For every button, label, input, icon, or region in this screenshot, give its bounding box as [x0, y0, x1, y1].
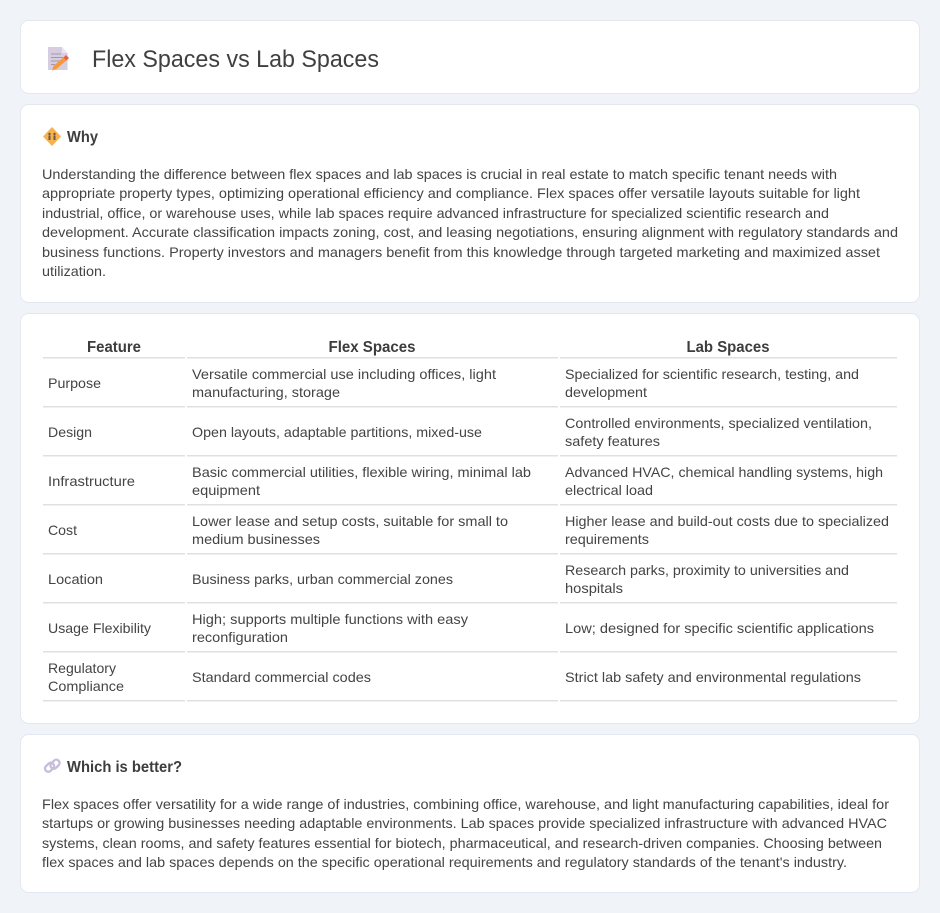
- row: infrastructure: [48, 464, 883, 498]
- row: purpose: Purpose: [48, 375, 101, 391]
- row: infrastructure: Infrastructure: [48, 473, 135, 489]
- table header row: Flex Spaces: [328, 339, 416, 356]
- text block: why paragraph: industrial, office, or warehouse uses, while lab spaces require advanced infrastructure for specialized scientific research and: [42, 205, 829, 221]
- text block: which is better paragraph: systems, clean rooms, and safety features essential for biotech, pharmaceutical, and research-driven companies. Choosing between: [42, 835, 882, 851]
- row: cost: [48, 513, 889, 547]
- icon: warning diamond: [44, 128, 60, 145]
- heading: why: Why: [67, 129, 98, 146]
- row: infrastructure: Basic commercial utilities, flexible wiring, minimal lab: [192, 464, 531, 480]
- row: usage flexibility: Low; designed for specific scientific applications: [565, 620, 874, 636]
- panel: which is better: [20, 734, 920, 892]
- row: regulatory compliance: [48, 660, 861, 694]
- row: purpose: Specialized for scientific research, testing, and: [565, 366, 859, 382]
- row: usage flexibility: Usage Flexibility: [48, 620, 151, 636]
- row: usage flexibility: [48, 611, 874, 645]
- text block: why paragraph: development. Accurate classification impacts zoning, cost, and leasing negotiations, ensuring alignment with regulatory standards and: [42, 224, 898, 240]
- row: design: [48, 415, 872, 449]
- row: cost: medium businesses: [192, 531, 320, 547]
- text block: which is better paragraph: startups or growing businesses needing adaptable environments. Lab spaces provide specialized infrastructure with advanced HVAC: [42, 815, 887, 831]
- text block: why paragraph: Understanding the difference between flex spaces and lab spaces is crucial in real estate to match specific tenant needs with: [42, 166, 837, 182]
- row: usage flexibility: reconfiguration: [192, 629, 288, 645]
- row: cost: Lower lease and setup costs, suitable for small to: [192, 513, 508, 529]
- row: location: Research parks, proximity to universities and: [565, 562, 849, 578]
- table header row: [87, 339, 770, 356]
- row: location: hospitals: [565, 580, 623, 596]
- text block: which is better paragraph: Flex spaces offer versatility for a wide range of industries, combining office, warehouse, and light manufacturing capabilities, ideal for: [42, 796, 889, 812]
- row: cost: Higher lease and build-out costs due to specialized: [565, 513, 889, 529]
- panel: title header: [20, 20, 920, 94]
- row: location: Business parks, urban commercial zones: [192, 571, 453, 587]
- row: purpose: development: [565, 384, 647, 400]
- row: regulatory compliance: Standard commercial codes: [192, 669, 371, 685]
- icon: link: [44, 758, 61, 773]
- row: infrastructure: Advanced HVAC, chemical handling systems, high: [565, 464, 883, 480]
- row: purpose: [48, 366, 859, 400]
- row: location: Location: [48, 571, 103, 587]
- row: regulatory compliance: Compliance: [48, 678, 124, 694]
- row: purpose: Versatile commercial use including offices, light: [192, 366, 496, 382]
- row: design: safety features: [565, 433, 660, 449]
- row: design: Design: [48, 424, 92, 440]
- text block: why paragraph: business functions. Property investors and managers benefit from this knowledge through targeted marketing and maximized asset: [42, 244, 880, 260]
- text block: why paragraph: utilization.: [42, 263, 106, 279]
- text block: why paragraph: appropriate property types, optimizing operational efficiency and compliance. Flex spaces offer versatile layouts suitable for light: [42, 185, 860, 201]
- panel: comparison table: [20, 314, 920, 724]
- row: regulatory compliance: Strict lab safety and environmental regulations: [565, 669, 861, 685]
- row: design: Controlled environments, specialized ventilation,: [565, 415, 872, 431]
- table header row: Feature: [87, 339, 141, 356]
- row: infrastructure: equipment: [192, 482, 260, 498]
- text block: which is better paragraph: [42, 796, 889, 870]
- icon: memo with pencil: [48, 47, 69, 70]
- table header row: Lab Spaces: [686, 339, 770, 356]
- row: design: Open layouts, adaptable partitions, mixed-use: [192, 424, 482, 440]
- row: regulatory compliance: Regulatory: [48, 660, 116, 676]
- heading: which is better: Which is better?: [67, 759, 182, 776]
- panel: why: [20, 104, 920, 302]
- text block: why paragraph: [42, 166, 898, 279]
- row: cost: requirements: [565, 531, 649, 547]
- row: purpose: manufacturing, storage: [192, 384, 340, 400]
- row: usage flexibility: High; supports multiple functions with easy: [192, 611, 468, 627]
- text block: which is better paragraph: flex spaces and lab spaces depends on the specific operational requirements and regulatory standards of the tenant's industry.: [42, 854, 847, 870]
- row: cost: Cost: [48, 522, 77, 538]
- row: location: [48, 562, 849, 596]
- title: Flex Spaces vs Lab Spaces: [92, 46, 379, 73]
- row: infrastructure: electrical load: [565, 482, 653, 498]
